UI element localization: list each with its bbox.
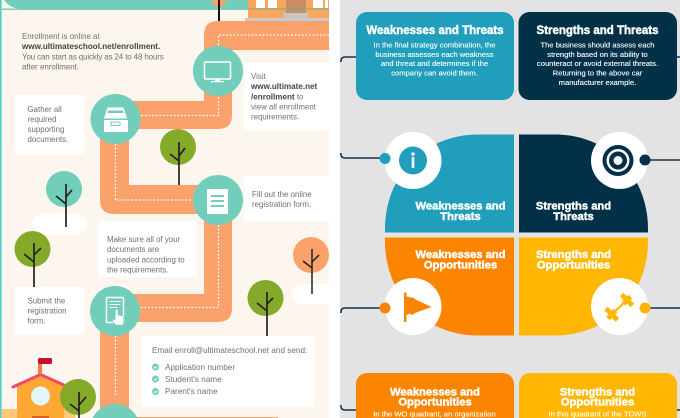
text box: fill out xyxy=(244,176,329,221)
card: weaknesses and threats: and threat and determines if the xyxy=(381,59,488,68)
clouds xyxy=(32,214,329,304)
text box: submit: Submit the xyxy=(28,296,66,306)
card: weaknesses and opportunities: Opportunities xyxy=(398,396,472,408)
card: strengths and threats: counteract or avoid external threats. xyxy=(537,59,658,68)
text box: gather: Gather all xyxy=(28,105,62,114)
quadrant: weaknesses and threats: Threats xyxy=(440,211,481,223)
quadrant: strengths and threats: Strengths and xyxy=(536,200,611,212)
text box: intro: Enrollment is online at xyxy=(22,32,100,41)
text box: gather: required xyxy=(28,115,56,124)
icon: green tree by school xyxy=(60,379,96,418)
quadrant: weaknesses and opportunities: Weaknesses and xyxy=(416,249,506,261)
text box: gather xyxy=(15,95,84,154)
quadrant: weaknesses and threats xyxy=(385,134,514,232)
icon: orange tree right xyxy=(293,237,329,294)
card: weaknesses and opportunities xyxy=(356,373,514,418)
card: strengths and threats: strength based on its ability to xyxy=(547,50,648,59)
text box: gather: documents. xyxy=(28,135,68,144)
icon: dumbbell xyxy=(591,278,650,335)
text box: visit: view all enrollment xyxy=(251,102,317,112)
icon: green tree left xyxy=(14,231,50,287)
quadrant: strengths and threats: Threats xyxy=(553,211,594,223)
text box: gather: supporting xyxy=(28,125,64,134)
icon: bottom step circle xyxy=(92,404,138,418)
quadrant: strengths and opportunities: Opportunities xyxy=(537,260,610,272)
icon: teal tree left xyxy=(46,171,82,227)
icon: tablet touch step xyxy=(90,286,140,336)
text box: make sure: documents are xyxy=(107,245,160,254)
header band xyxy=(4,0,248,8)
quadrant: strengths and opportunities xyxy=(519,238,648,336)
text box: intro: You can start as quickly as 24 to 48 hours xyxy=(22,52,164,62)
card: strengths and threats: Strengths and Threats xyxy=(536,25,659,37)
text box: fill out: Fill out the online xyxy=(252,190,312,199)
card: strengths and threats xyxy=(518,12,677,100)
card: weaknesses and threats: Weaknesses and Threats xyxy=(366,25,504,37)
card: weaknesses and threats xyxy=(356,12,514,100)
road dotted guide xyxy=(115,35,329,395)
text box: email checklist: Application number xyxy=(165,363,235,372)
icon: flag xyxy=(380,278,442,335)
text box: make sure: uploaded according to xyxy=(107,256,185,264)
card: strengths and threats: Returning to the above car xyxy=(553,68,643,78)
quadrant: weaknesses and opportunities: Opportunities xyxy=(424,260,497,272)
icon: green tree centre xyxy=(160,129,196,185)
card: weaknesses and threats: In the final strategy combination, the xyxy=(374,40,496,50)
text box: visit: www.ultimate.net xyxy=(250,82,318,91)
text box: make sure: Make sure all of your xyxy=(107,235,181,244)
card: strengths and opportunities xyxy=(519,373,677,418)
text box: make sure: the requirements. xyxy=(107,266,168,274)
card: strengths and opportunities: Opportunities xyxy=(561,396,634,408)
text box: email checklist: Parent's name xyxy=(165,387,218,396)
text box: email checklist: Email enroll@ultimateschool.net and send: xyxy=(152,346,307,355)
connector lines xyxy=(341,57,680,410)
card: strengths and threats: The business should assess each xyxy=(541,40,654,50)
card: weaknesses and threats: company can avoid them. xyxy=(391,68,478,78)
panel: TOWS matrix xyxy=(340,0,680,418)
text box: submit: registration xyxy=(28,306,67,316)
icon: file box step xyxy=(90,94,140,144)
card: strengths and opportunities: Strengths and xyxy=(560,386,635,398)
quadrant: strengths and threats xyxy=(519,134,648,232)
text box: submit: form. xyxy=(28,316,45,326)
icon: school building xyxy=(2,358,76,418)
card: weaknesses and opportunities: Weaknesses and xyxy=(390,386,480,398)
text box: fill out: registration form. xyxy=(252,200,311,209)
icon: form step xyxy=(193,175,243,225)
text box: submit xyxy=(15,287,84,334)
text box: visit xyxy=(244,63,329,130)
quadrant: weaknesses and opportunities xyxy=(385,238,514,336)
text box: email checklist: Student's name xyxy=(165,375,222,384)
icon: monitor step xyxy=(193,46,243,96)
orange road xyxy=(100,21,329,418)
text box: visit: Visit xyxy=(251,72,267,81)
icon: info xyxy=(380,132,442,189)
icon: target xyxy=(591,132,650,189)
quadrant: weaknesses and threats: Weaknesses and xyxy=(416,200,506,212)
icon: green tree right xyxy=(248,280,284,336)
text box: visit: requirements. xyxy=(251,112,299,122)
text box: intro: after enrollment. xyxy=(22,62,79,72)
card: strengths and threats: manufacturer example. xyxy=(559,78,636,87)
text box: make sure xyxy=(98,221,197,277)
quadrant: strengths and opportunities: Strengths and xyxy=(536,249,611,261)
panel: enrollment roadmap xyxy=(0,0,329,418)
text box: visit: /enrollment to xyxy=(251,92,303,102)
card: weaknesses and threats: business assesses each weakness xyxy=(375,50,494,59)
text box: intro: www.ultimateschool.net/enrollment. xyxy=(21,42,160,51)
text box: email checklist xyxy=(141,336,314,406)
building at top xyxy=(245,0,329,21)
